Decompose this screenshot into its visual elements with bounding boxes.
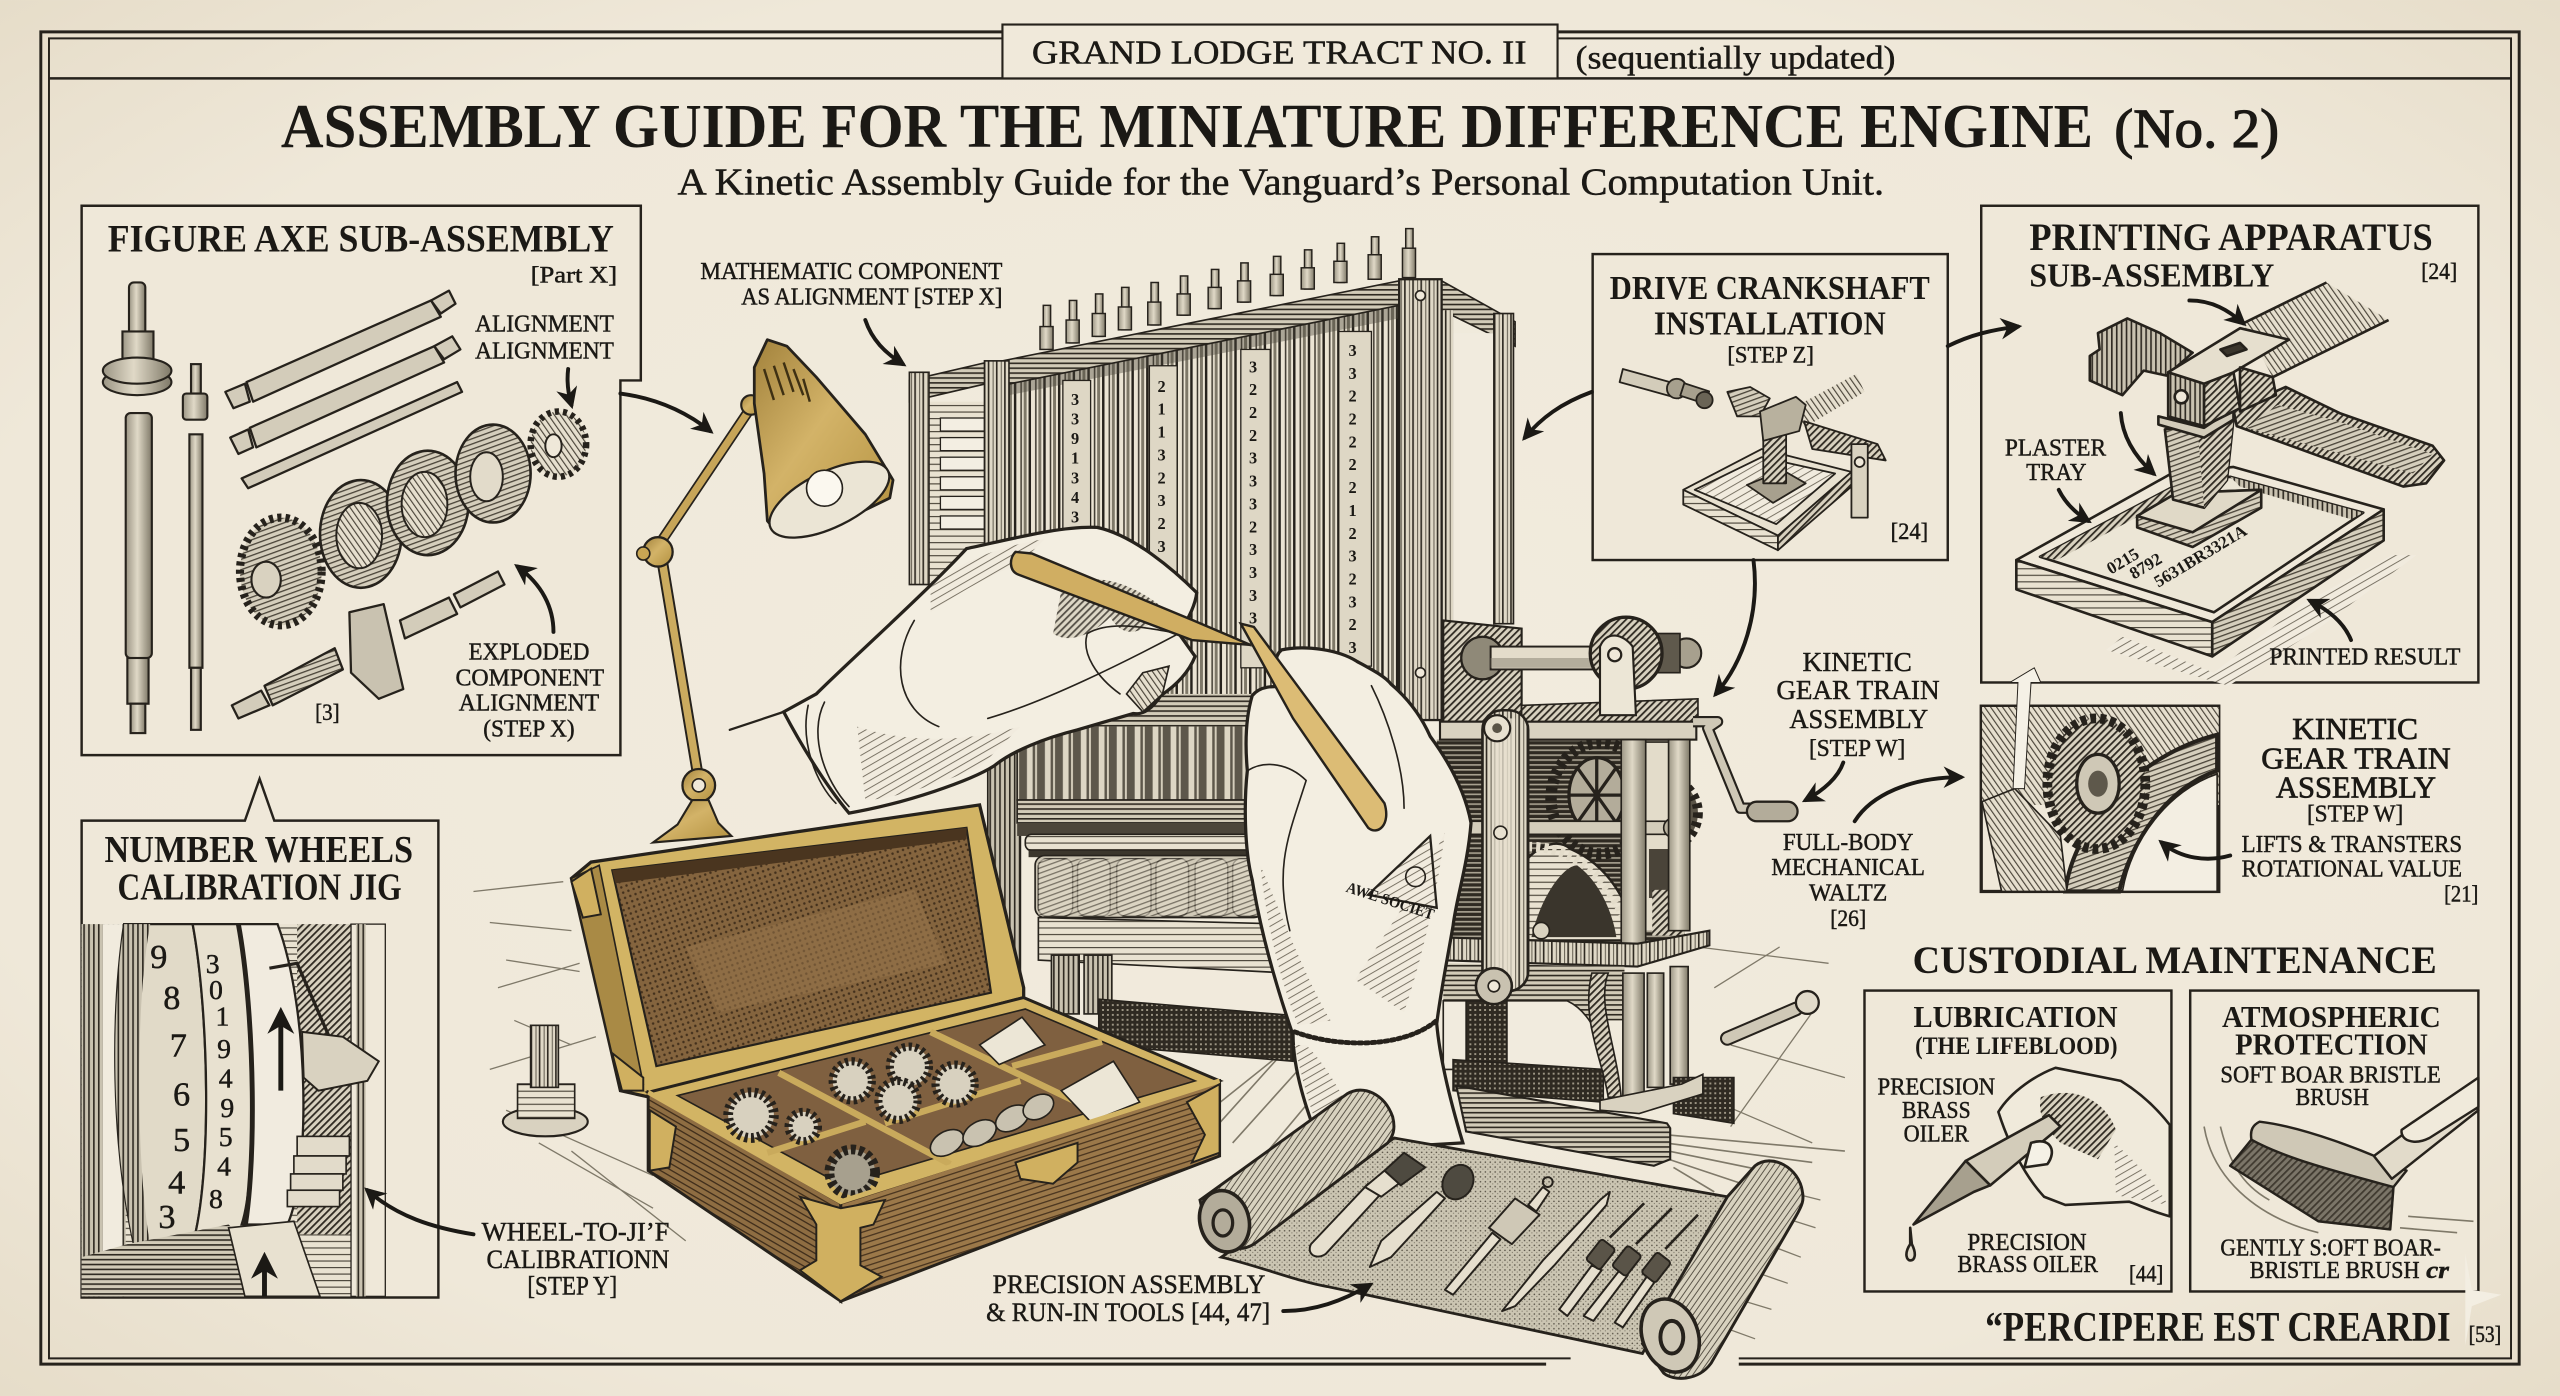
label: kinetic gear train (right): KINETIC [2292,712,2418,746]
heading: ATMOSPHERIC [2222,999,2441,1034]
wheel digits: 9 [150,938,167,976]
difference engine: 3222333233333 [1249,357,1257,651]
case contents [728,1017,1140,1195]
label: full-body mechanical waltz: FULL-BODY [1783,829,1914,856]
exploded component label: COMPONENT [456,664,604,691]
floor hatching [473,882,1845,1339]
heading: NUMBER WHEELS [104,830,413,871]
label: full-body mechanical waltz: [26] [1830,906,1866,931]
wheel digits: 5 [173,1121,190,1159]
wheel digits [150,938,190,1236]
label: full-body mechanical waltz: WALTZ [1809,879,1887,906]
arrow: waltz to gear inset [1855,777,1961,821]
heading [104,830,413,909]
gentle brushing label [2220,1236,2450,1284]
printed result label: PRINTED RESULT [2269,644,2461,671]
right side framing [1442,281,1515,346]
left gloved hand [730,527,1197,813]
exploded alignment arrow [518,567,553,632]
AWE Society mark [1344,836,1437,924]
wheel digits: 8 [163,979,180,1017]
jig illustration: 3 [206,949,220,980]
label: wheel-to-jig calibration: CALIBRATIONN [487,1244,669,1274]
reference 44: [44] [2129,1262,2163,1287]
heading: FIGURE AXE SUB-ASSEMBLY [108,217,614,260]
right gloved hand [1245,648,1471,1151]
printed numerals [2103,521,2251,591]
jig illustration: 5 [219,1122,233,1153]
heading: SUB-ASSEMBLY [2029,258,2274,295]
wheel digits: 4 [168,1164,185,1202]
label: kinetic gear train (centre): KINETIC [1802,647,1912,678]
case interior [648,998,1220,1202]
AWE Society mark: AWE SOCIET [1344,879,1437,924]
number strips [1063,331,1371,676]
oiler label: BRASS [1902,1098,1971,1124]
label: kinetic gear train (right): LIFTS & TRANSTERS [2242,831,2462,858]
gears and number discs [240,411,586,625]
printed numerals: 0215 [2103,544,2142,578]
heading: PROTECTION [2235,1027,2428,1062]
panel: figure axe sub-assembly [82,206,641,755]
gear train housing [1443,620,1522,722]
jig illustration: 0 [209,975,223,1006]
heading: (THE LIFEBLOOD) [1915,1032,2118,1060]
connecting link [1482,710,1528,991]
jig illustration: 1 [216,1001,229,1032]
heading: LUBRICATION [1913,999,2118,1034]
difference engine [909,229,1798,1166]
label: wheel-to-jig calibration: WHEEL-TO-JI’F [482,1216,669,1246]
heading: CALIBRATION JIG [118,868,402,909]
lower table [1437,931,1709,967]
label: mathematic component [700,259,1003,311]
printed numerals: 5631BR3321A [2151,521,2251,591]
brass corners and clasp [571,869,1220,1301]
label: kinetic gear train (right): [STEP W] [2307,800,2403,827]
oiler label: OILER [1904,1121,1969,1147]
pins on top [1040,229,1416,349]
instrument case [571,805,1220,1301]
hand with brass oiler [1906,1068,2170,1260]
label: mathematic component: MATHEMATIC COMPONENT [700,259,1003,285]
label: kinetic gear train (centre): GEAR TRAIN [1776,675,1940,706]
wheel digits: 3 [158,1198,176,1236]
lamp shade [754,340,893,534]
top beam [986,281,1399,389]
panel: gear train detail [1981,668,2219,891]
alignment label [475,310,614,365]
arrow: crankshaft to printing apparatus [1948,327,2018,346]
boar bristle brush [2204,1078,2478,1233]
oiler label [1878,1075,1995,1147]
mat [1221,1138,1727,1354]
alignment label: ALIGNMENT [475,310,614,337]
heading: INSTALLATION [1654,306,1886,343]
brass lamp [637,340,900,842]
crank [1693,722,1757,808]
brush label: BRUSH [2296,1085,2369,1111]
arrow: crankshaft to frame [1525,392,1592,438]
precision brass oiler label: PRECISION [1967,1230,2087,1256]
panel: drive crankshaft installation [1593,254,1948,560]
mini crankshaft illustration [1620,369,1886,550]
white arrow [2010,668,2041,789]
gentle brushing label: BRISTLE BRUSH [2250,1258,2420,1284]
heading [1610,270,1930,343]
gentle brushing label: cr [2426,1258,2450,1284]
wheel digits: 6 [173,1075,190,1113]
up arrow [279,1012,282,1091]
table top and columns [1440,722,1696,740]
arrow: mathematic component [865,320,903,364]
arrow: kinetic to crank [1806,762,1843,800]
arrow: stamp [2121,413,2153,474]
label: kinetic gear train (right): [21] [2444,882,2478,907]
motto: “PERCIPERE EST CREARDI [1985,1304,2451,1351]
alignment arrow [568,369,571,405]
heading [1913,999,2118,1060]
jig illustration: 4 [219,1063,233,1094]
plaster tray label: PLASTER [2005,435,2107,462]
tools on roll [1310,1153,1698,1327]
title: ASSEMBLY GUIDE FOR THE MINIATURE DIFFERENCE ENGINE [281,93,2093,161]
gear mass [1437,740,1685,944]
part reference: [Part X] [531,262,617,287]
label: mathematic component: AS ALIGNMENT [STEP X] [741,285,1002,311]
subtitle: A Kinetic Assembly Guide for the Vanguard’s Personal Computation Unit. [678,161,1884,203]
lower carriage [988,718,1020,996]
difference engine: 33222221232323 [1349,341,1357,657]
reference 3: [3] [315,700,340,725]
exploded component label: ALIGNMENT [459,690,599,717]
number columns [1009,302,1399,767]
arrow: printed result [2310,601,2351,640]
plaster tray label [2005,435,2107,486]
arrow: figure axe to lamp [620,394,710,431]
label: kinetic gear train (right): ASSEMBLY [2276,771,2436,805]
panel: atmospheric protection [2190,991,2478,1291]
diagonal shafts [225,291,504,718]
label: precision assembly tools [986,1269,1270,1327]
printed numerals: 8792 [2126,549,2165,583]
difference engine: 3391343340 [1071,390,1079,585]
number wheel roller [1035,856,1264,918]
reference 24: [24] [1891,519,1928,544]
difference engine: 211323234356 [1158,377,1166,647]
uprights [909,372,929,585]
heading: DRIVE CRANKSHAFT [1610,270,1930,307]
arrow: precision tools [1283,1285,1370,1311]
precision brass oiler label [1958,1230,2098,1278]
wheel digits: 7 [170,1026,187,1064]
left roll [1200,1090,1394,1249]
arrow: head [2189,300,2243,323]
heading: custodial maintenance: CUSTODIAL MAINTENANCE [1913,939,2437,982]
label: kinetic gear train (centre): [STEP W] [1809,735,1905,762]
case walls [648,1092,841,1301]
base plinth [1673,1078,1734,1123]
brush label: SOFT BOAR BRISTLE [2220,1062,2441,1088]
jig illustration [82,924,385,1296]
tool roll [1193,1090,1803,1380]
jig illustration: 9 [217,1034,231,1065]
header note: (sequentially updated) [1576,41,1896,77]
label: kinetic gear train (centre): ASSEMBLY [1789,704,1928,735]
reference 24: [24] [2421,259,2457,284]
jig illustration: 8 [209,1184,223,1215]
loose spanner [1727,991,1819,1038]
white marks near motto [2465,1254,2501,1345]
gold tweezers [1011,552,1386,830]
exploded spindle parts [103,282,207,733]
panel: number wheels calibration jig [82,779,438,1298]
brush label [2220,1062,2441,1111]
arrow: wheel-to-jig [367,1190,473,1234]
heading [2222,999,2441,1062]
arrow: gear lift [2162,842,2230,859]
label: full-body mechanical waltz [1771,829,1925,931]
printing mechanism [2016,282,2444,686]
label: precision assembly tools: & RUN-IN TOOLS [44, 47] [986,1297,1270,1327]
oiler label: PRECISION [1878,1075,1995,1101]
small spindle stand [503,1025,588,1136]
case lid [571,805,1024,1097]
heading: PRINTING APPARATUS [2029,216,2433,259]
label: kinetic gear train (centre) [1776,647,1940,762]
arrow: plaster tray [2059,490,2088,521]
panel: printing apparatus sub-assembly [1981,206,2478,686]
gentle brushing label: GENTLY S:OFT BOAR- [2220,1236,2441,1262]
reference 53: [53] [2469,1322,2501,1347]
precision brass oiler label: BRASS OILER [1958,1252,2098,1278]
header tab [1002,25,1558,78]
exploded component label: EXPLODED [469,638,589,665]
exploded component label [456,638,604,742]
heading [2029,216,2433,295]
title: (No. 2) [2114,99,2279,160]
label: kinetic gear train (right) [2242,712,2478,907]
panel: lubrication [1864,991,2171,1291]
arrow: crankshaft to gear train [1716,560,1755,694]
alignment label: ALIGNMENT [475,338,614,365]
jig illustration: 4 [217,1152,231,1183]
label: full-body mechanical waltz: MECHANICAL [1771,854,1925,881]
label: wheel-to-jig calibration [482,1216,669,1300]
jig illustration: 9 [220,1093,234,1124]
label: kinetic gear train (right): ROTATIONAL VALUE [2242,855,2462,882]
label: wheel-to-jig calibration: [STEP Y] [527,1270,617,1300]
plaster tray label: TRAY [2026,459,2087,486]
right roll [1642,1161,1803,1378]
label: kinetic gear train (right): GEAR TRAIN [2261,742,2451,776]
label: precision assembly tools: PRECISION ASSEMBLY [993,1269,1265,1299]
header tab: GRAND LODGE TRACT NO. II [1032,34,1527,72]
exploded component label: (STEP X) [483,715,575,742]
step z: [STEP Z] [1727,342,1814,367]
